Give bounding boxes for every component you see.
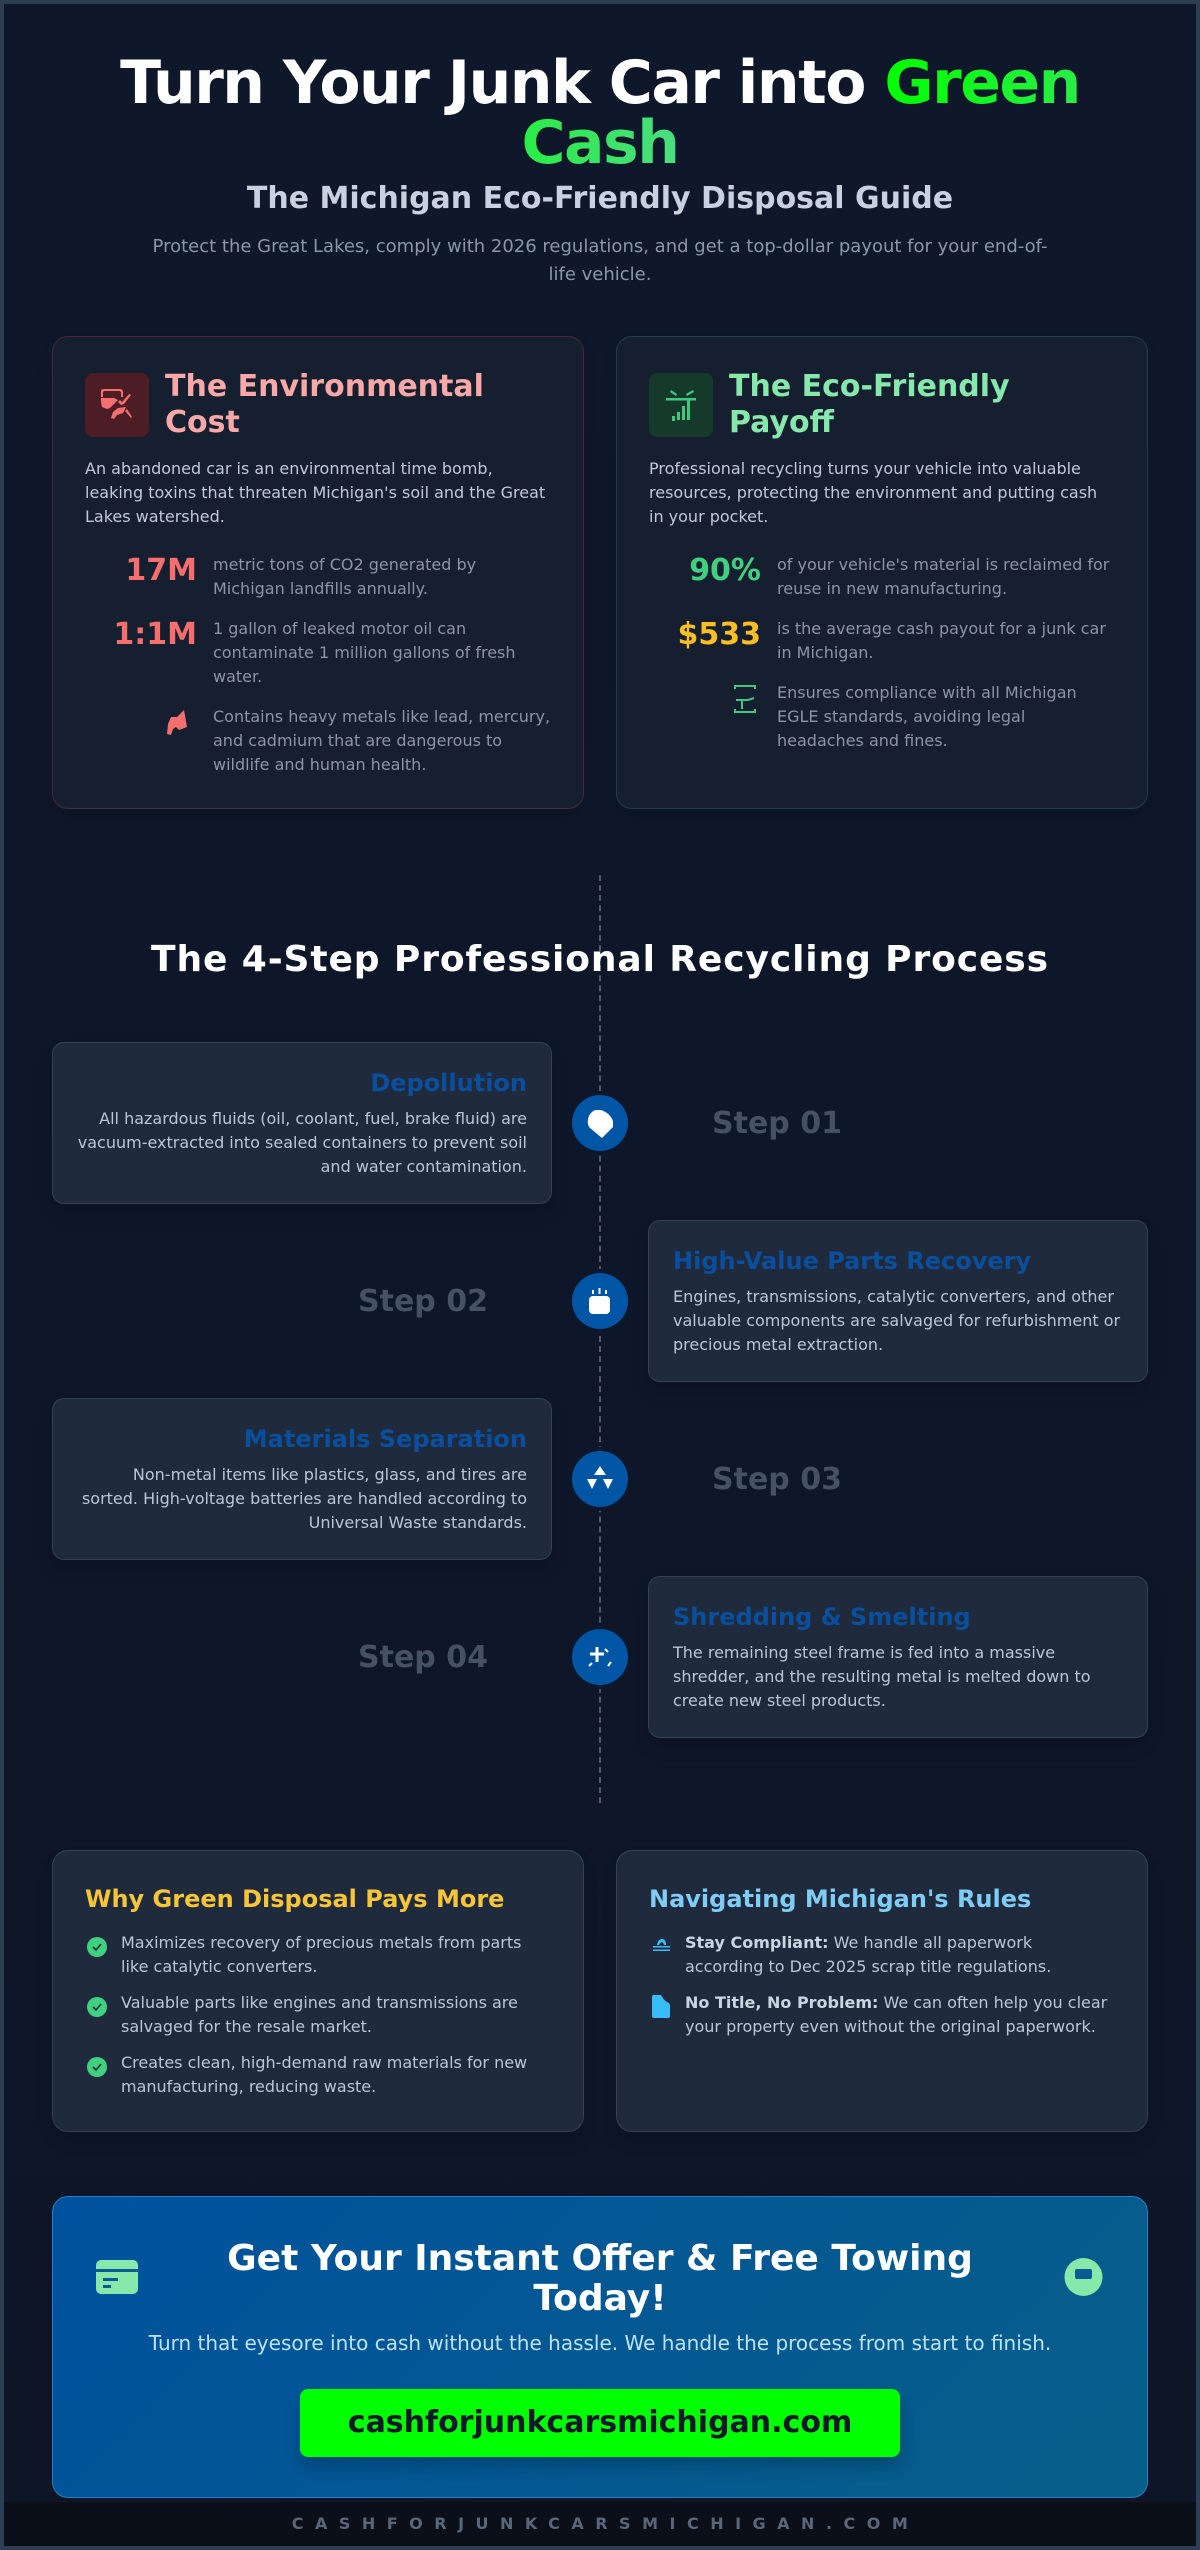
step 1 text (78, 1109, 527, 1176)
list item 2: Valuable parts like engines and transmissions are (121, 1993, 518, 2012)
stat text: heavy metals: wildlife and human health. (213, 755, 426, 774)
stat text: 1:1M: 1 gallon of leaked motor oil can (213, 619, 466, 638)
stat text: 90%: of your vehicle's material is reclaimed for (777, 555, 1109, 574)
heading: The Environmental (165, 369, 484, 404)
stat: 90%: 90% (689, 553, 761, 588)
list item: no title: No Title, No Problem: We can often help you clear (685, 1993, 1107, 2012)
step 1 card (52, 1042, 552, 1204)
heading: Why Green Disposal Pays More (85, 1885, 504, 1913)
icon: compliance (734, 685, 756, 713)
list item: stay compliant: according to Dec 2025 scrap title regulations. (685, 1957, 1051, 1976)
step 2 text (673, 1287, 1120, 1354)
list item: no title: your property even without the original paperwork. (685, 2017, 1096, 2036)
panel: the environmental cost (52, 336, 584, 809)
list item 2 (121, 1993, 518, 2036)
step 3 text: sorted. High-voltage batteries are handled according to (82, 1489, 527, 1508)
timeline center line (599, 875, 601, 1803)
stat text: $533 (777, 619, 1106, 662)
step 4 text: shredder, and the resulting metal is melted down to (673, 1667, 1091, 1686)
step 3 label: Step 03 (712, 1462, 842, 1497)
heading (165, 369, 484, 440)
stat text: $533: in Michigan. (777, 643, 874, 662)
step 2 marker (572, 1273, 628, 1329)
list item: stay compliant (685, 1933, 1051, 1976)
step 3 heading: Materials Separation (244, 1425, 527, 1453)
icon: document (652, 1995, 670, 2018)
stat text: 1:1M: water. (213, 667, 262, 686)
heading: The Eco-Friendly (729, 369, 1010, 404)
cta heading (227, 2238, 973, 2319)
stat: 17M: 17M (125, 553, 197, 588)
step 3 text (82, 1465, 527, 1532)
step 4 text: create new steel products. (673, 1691, 886, 1710)
step 4 text (672, 1643, 1091, 1710)
stat text: 1:1M: contaminate 1 million gallons of fresh (213, 643, 516, 662)
list item 1 (121, 1933, 522, 1976)
title: Turn Your Junk Car into Green Cash (120, 48, 1080, 178)
step 4 label: Step 04 (358, 1640, 488, 1675)
footer: CASHFORJUNKCARSMICHIGAN.COM (292, 2514, 919, 2533)
step 2 label: Step 02 (358, 1284, 488, 1319)
list item 3: manufacturing, reducing waste. (121, 2077, 376, 2096)
list item: stay compliant: Stay Compliant: We handle all paperwork (685, 1933, 1032, 1952)
step 2 text: precious metal extraction. (673, 1335, 883, 1354)
panel: why green disposal pays more (52, 1850, 584, 2132)
step 1 text: and water contamination. (321, 1157, 527, 1176)
cta heading: Today! (533, 2278, 667, 2319)
stat: $533: $533 (678, 617, 761, 652)
step 3 text: Non-metal items like plastics, glass, and tires are (133, 1465, 527, 1484)
stat text: $533: is the average cash payout for a junk car (777, 619, 1106, 638)
icon: recycling value chart (649, 373, 713, 437)
step 3 marker (572, 1451, 628, 1507)
icon: coin (1064, 2258, 1102, 2296)
stat text: 90% (777, 555, 1110, 598)
icon: balance (653, 1939, 670, 1951)
step 2 text: valuable components are salvaged for refurbishment or (673, 1311, 1120, 1330)
list item 1: Maximizes recovery of precious metals from parts (121, 1933, 522, 1952)
icon: check 3 (87, 2057, 107, 2077)
header description: Protect the Great Lakes, comply with 2026 regulations, and get a top-dollar payout for your end-of-life vehicle. (153, 236, 1047, 285)
step 4 card (648, 1576, 1148, 1738)
list item 3 (121, 2053, 527, 2096)
stat text: heavy metals (213, 707, 550, 774)
intro text: Professional recycling turns your vehicle into valuable (649, 459, 1081, 478)
step 4 text: The remaining steel frame is fed into a massive (673, 1643, 1055, 1662)
intro text: resources, protecting the environment and putting cash (649, 483, 1097, 502)
heading: Cost (165, 405, 240, 440)
intro text: leaking toxins that threaten Michigan's soil and the Great (85, 483, 545, 502)
intro text: An abandoned car is an environmental time bomb, (85, 459, 493, 478)
step 2 heading: High-Value Parts Recovery (673, 1247, 1031, 1275)
icon: leaking car (85, 373, 149, 437)
stat text: 1:1M (213, 619, 516, 686)
stat text: heavy metals: and cadmium that are dangerous to (213, 731, 502, 750)
stat text: heavy metals: Contains heavy metals like lead, mercury, (213, 707, 550, 726)
panel: the eco-friendly payoff (616, 336, 1148, 809)
cta button (300, 2389, 900, 2457)
step 4 heading: Shredding & Smelting (673, 1603, 971, 1631)
panel: call to action (52, 2196, 1148, 2498)
step 2 text: Engines, transmissions, catalytic converters, and other (673, 1287, 1114, 1306)
heading (729, 369, 1010, 440)
step 4 marker (572, 1629, 628, 1685)
panel: navigating michigan's rules (616, 1850, 1148, 2132)
icon: check 1 (87, 1937, 107, 1957)
stat text: compliance (777, 683, 1077, 750)
list item 3: Creates clean, high-demand raw materials for new (121, 2053, 527, 2072)
list item: no title (685, 1993, 1108, 2036)
cta button: cashforjunkcarsmichigan.com (348, 2405, 852, 2440)
step 1 heading: Depollution (370, 1069, 527, 1097)
icon: heavy metals (167, 710, 187, 735)
list item 2: salvaged for the resale market. (121, 2017, 372, 2036)
cta heading: Get Your Instant Offer & Free Towing (227, 2238, 973, 2279)
icon: check 2 (87, 1997, 107, 2017)
heading: Payoff (729, 405, 834, 440)
section heading: The 4-Step Professional Recycling Process (151, 939, 1049, 980)
step 1 marker (572, 1095, 628, 1151)
step 3 text: Universal Waste standards. (309, 1513, 527, 1532)
step 1 text: All hazardous fluids (oil, coolant, fuel, brake fluid) are (99, 1109, 527, 1128)
step 1 label: Step 01 (712, 1106, 842, 1141)
stat text: 90%: reuse in new manufacturing. (777, 579, 1007, 598)
step 1 text: vacuum-extracted into sealed containers to prevent soil (78, 1133, 527, 1152)
stat text: compliance: EGLE standards, avoiding legal (777, 707, 1025, 726)
icon: card (96, 2260, 138, 2294)
header (120, 48, 1080, 285)
footer (4, 2502, 1196, 2546)
stat text: compliance: headaches and fines. (777, 731, 948, 750)
intro text (85, 459, 545, 526)
stat text: 17M: Michigan landfills annually. (213, 579, 428, 598)
stat text: 17M: metric tons of CO2 generated by (213, 555, 476, 574)
stat text: 17M (213, 555, 476, 598)
stat text: compliance: Ensures compliance with all Michigan (777, 683, 1077, 702)
list item 1: like catalytic converters. (121, 1957, 317, 1976)
step 2 card (648, 1220, 1148, 1382)
cta text: Turn that eyesore into cash without the hassle. We handle the process from start to finish. (149, 2331, 1051, 2355)
heading: Navigating Michigan's Rules (649, 1885, 1031, 1913)
stat: 1:1M: 1:1M (113, 617, 197, 652)
subtitle: The Michigan Eco-Friendly Disposal Guide (247, 181, 953, 216)
intro text: in your pocket. (649, 507, 768, 526)
intro text: Lakes watershed. (85, 507, 225, 526)
intro text (649, 459, 1097, 526)
step 3 card (52, 1398, 552, 1560)
